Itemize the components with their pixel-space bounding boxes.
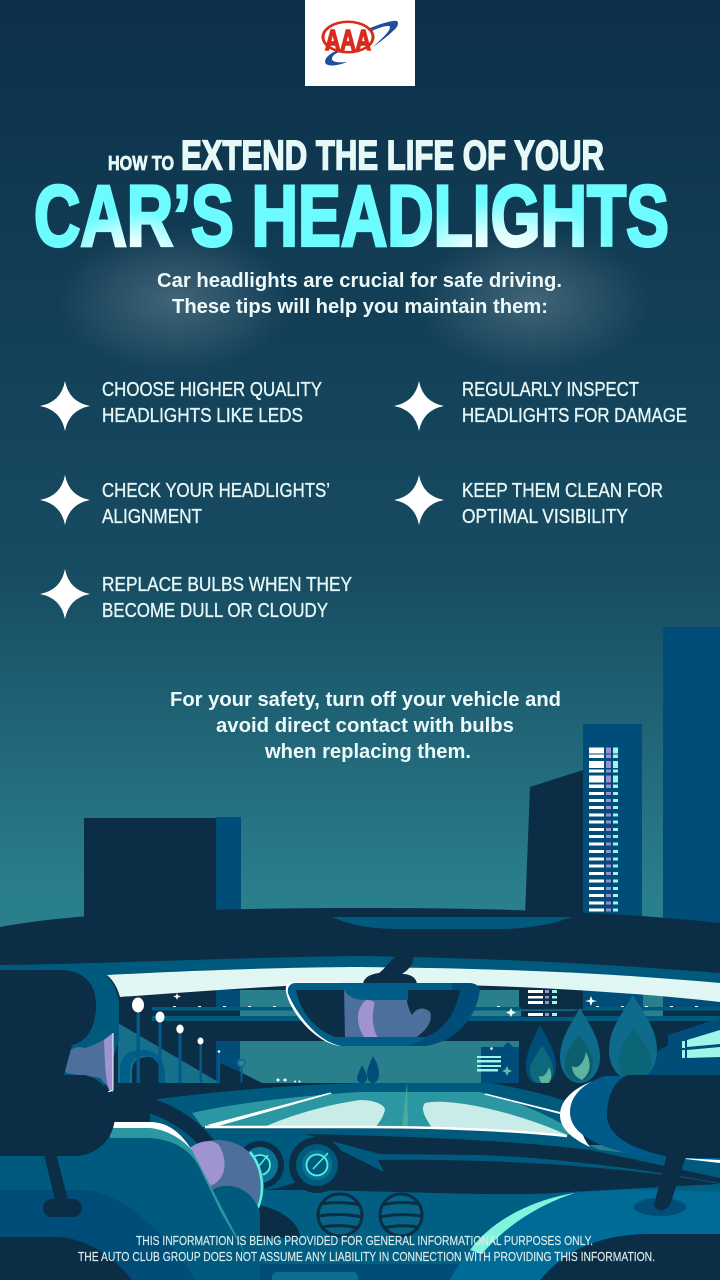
tip: alignment: ALIGNMENT (102, 505, 202, 528)
title (34, 132, 669, 264)
tip: replace bulbs: REPLACE BULBS WHEN THEY (102, 573, 352, 596)
gauge left (236, 1141, 284, 1189)
intro text: Car headlights are crucial for safe driving. (157, 269, 562, 292)
tip: clean: OPTIMAL VISIBILITY (462, 505, 628, 528)
icon: sparkle (40, 381, 90, 431)
street lamps (132, 998, 246, 1083)
seat post (43, 1150, 68, 1200)
safety note: For your safety, turn off your vehicle and (170, 688, 561, 711)
small building (477, 1042, 519, 1083)
driver seat (113, 1122, 192, 1150)
dashboard (0, 1127, 720, 1280)
intro text (157, 269, 562, 318)
city skyline (84, 627, 720, 927)
headrest blue (0, 965, 119, 1048)
driver face (64, 1033, 113, 1093)
tip: clean (394, 475, 663, 528)
tip: alignment: CHECK YOUR HEADLIGHTS’ (102, 479, 330, 502)
highway bands (152, 1007, 720, 1021)
windshield frame (0, 956, 720, 1100)
passenger seat (450, 1190, 720, 1280)
intro text: These tips will help you maintain them: (172, 295, 548, 318)
tip: higher quality: HEADLIGHTS LIKE LEDS (102, 404, 303, 427)
vents (318, 1194, 422, 1236)
tip: higher quality (40, 378, 322, 431)
disclaimer: THIS INFORMATION IS BEING PROVIDED FOR GENERAL INFORMATIONAL PURPOSES ONLY. (136, 1234, 593, 1248)
title line 1 (108, 132, 604, 178)
lights and stars (173, 993, 698, 1082)
title line 1: HOW TO (108, 153, 174, 175)
passenger headrest (560, 1075, 720, 1216)
tip: clean: KEEP THEM CLEAN FOR (462, 479, 663, 502)
icon: sparkle (40, 475, 90, 525)
icon: sparkle (40, 569, 90, 619)
rearview mirror (286, 953, 480, 1046)
safety note: when replacing them. (264, 740, 471, 763)
windshield glare (107, 967, 720, 1002)
pine trees (526, 995, 657, 1086)
headlight glow (57, 228, 650, 372)
steering wheel (120, 1100, 212, 1150)
mini tower (521, 990, 583, 1017)
tip: inspect (394, 378, 687, 431)
driver and steering wheel (0, 965, 300, 1280)
windshield scene (100, 975, 720, 1145)
console (255, 1264, 470, 1280)
road and hood (150, 1083, 575, 1140)
tip: alignment (40, 475, 330, 528)
lower dash (262, 1184, 720, 1280)
mirror mount (363, 953, 417, 985)
gauge right (289, 1137, 345, 1193)
logo: AAA: AAA (325, 25, 371, 57)
tip: replace bulbs (40, 569, 352, 622)
distant buildings (118, 985, 720, 1084)
icon: sparkle (394, 381, 444, 431)
safety note: avoid direct contact with bulbs (216, 714, 514, 737)
logo: AAA (305, 0, 415, 86)
tower windows (589, 748, 618, 912)
disclaimer (78, 1234, 655, 1264)
mirror reflection (296, 990, 460, 1037)
tip: inspect: REGULARLY INSPECT (462, 378, 639, 401)
right building (647, 1018, 720, 1075)
headrest (0, 970, 115, 1156)
car roof (0, 908, 720, 990)
safety note (170, 688, 561, 763)
sun visor (332, 917, 572, 929)
tip: replace bulbs: BECOME DULL OR CLOUDY (102, 599, 328, 622)
tip: higher quality: CHOOSE HIGHER QUALITY (102, 378, 322, 401)
icon: sparkle (394, 475, 444, 525)
small trees (357, 1056, 379, 1083)
dash trim (305, 1134, 720, 1183)
